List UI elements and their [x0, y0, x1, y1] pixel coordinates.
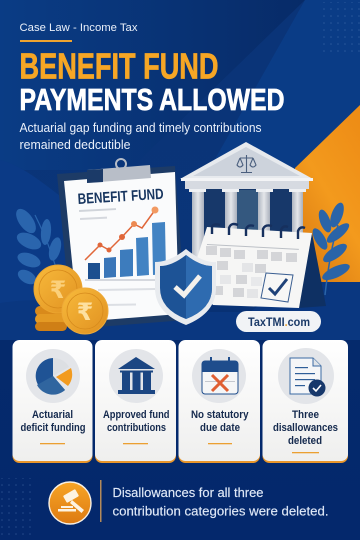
TaxTMI badge: TaxTMI.com: [248, 315, 310, 329]
icon: laurel left: [12, 206, 63, 287]
bar chart: [88, 222, 166, 280]
conclusion text: [112, 486, 328, 518]
calendar grid: [206, 246, 297, 298]
icon: rupee coins: ₹: [77, 298, 93, 326]
subtitle: [20, 121, 262, 152]
conclusion text: contribution categories were deleted.: [112, 504, 328, 518]
panel: actuarial deficit funding: [12, 340, 92, 463]
label: Actuarial: [32, 409, 73, 421]
icon: shield: [155, 249, 216, 325]
illustration: clipboard: [57, 159, 186, 329]
calendar rings: [212, 224, 305, 239]
label: contributions: [107, 422, 166, 434]
label: [273, 409, 338, 447]
icon: rupee coins: [34, 265, 108, 334]
line chart: [85, 206, 158, 260]
title line 2: PAYMENTS ALLOWED: [20, 82, 284, 117]
label: [103, 409, 170, 434]
label: deficit funding: [20, 422, 86, 434]
label: disallowances: [273, 422, 338, 434]
icon: bank: [109, 349, 163, 403]
calendar check box: [261, 273, 293, 302]
clipboard title: BENEFIT FUND: [77, 186, 164, 208]
label: Approved fund: [103, 409, 170, 421]
label: No statutory: [191, 409, 249, 421]
icon: pie chart: [26, 349, 80, 403]
divider: [100, 480, 102, 522]
TaxTMI badge: [236, 311, 321, 332]
foreground band: [0, 282, 360, 340]
label: Three: [292, 409, 319, 421]
kicker rule: [20, 40, 72, 42]
title line 1: BENEFIT FUND: [20, 46, 218, 86]
icon: document check: [278, 348, 334, 404]
icon: scales: [237, 155, 256, 172]
subtitle: Actuarial gap funding and timely contributions: [20, 121, 262, 135]
icon: calendar: [190, 224, 326, 308]
icon: laurel right: [310, 201, 352, 295]
conclusion text: Disallowances for all three: [112, 486, 264, 500]
icon: rupee coins: ₹: [50, 276, 66, 304]
icon: calendar cross: [192, 349, 246, 403]
panel: approved fund contributions: [95, 340, 176, 463]
clipboard clip: [87, 159, 151, 183]
panel: no statutory due date: [178, 340, 260, 463]
icon: gavel badge: [49, 482, 91, 524]
icon: court building: [180, 142, 313, 268]
kicker: Case Law - Income Tax: [20, 22, 138, 34]
label: due date: [200, 422, 240, 434]
label: [191, 409, 249, 434]
panel: three disallowances deleted: [262, 340, 348, 463]
subtitle: remained dedcutible: [20, 138, 131, 152]
title: [20, 46, 284, 117]
label: [20, 409, 86, 434]
label: deleted: [288, 435, 322, 447]
orange backdrop: [295, 105, 360, 282]
